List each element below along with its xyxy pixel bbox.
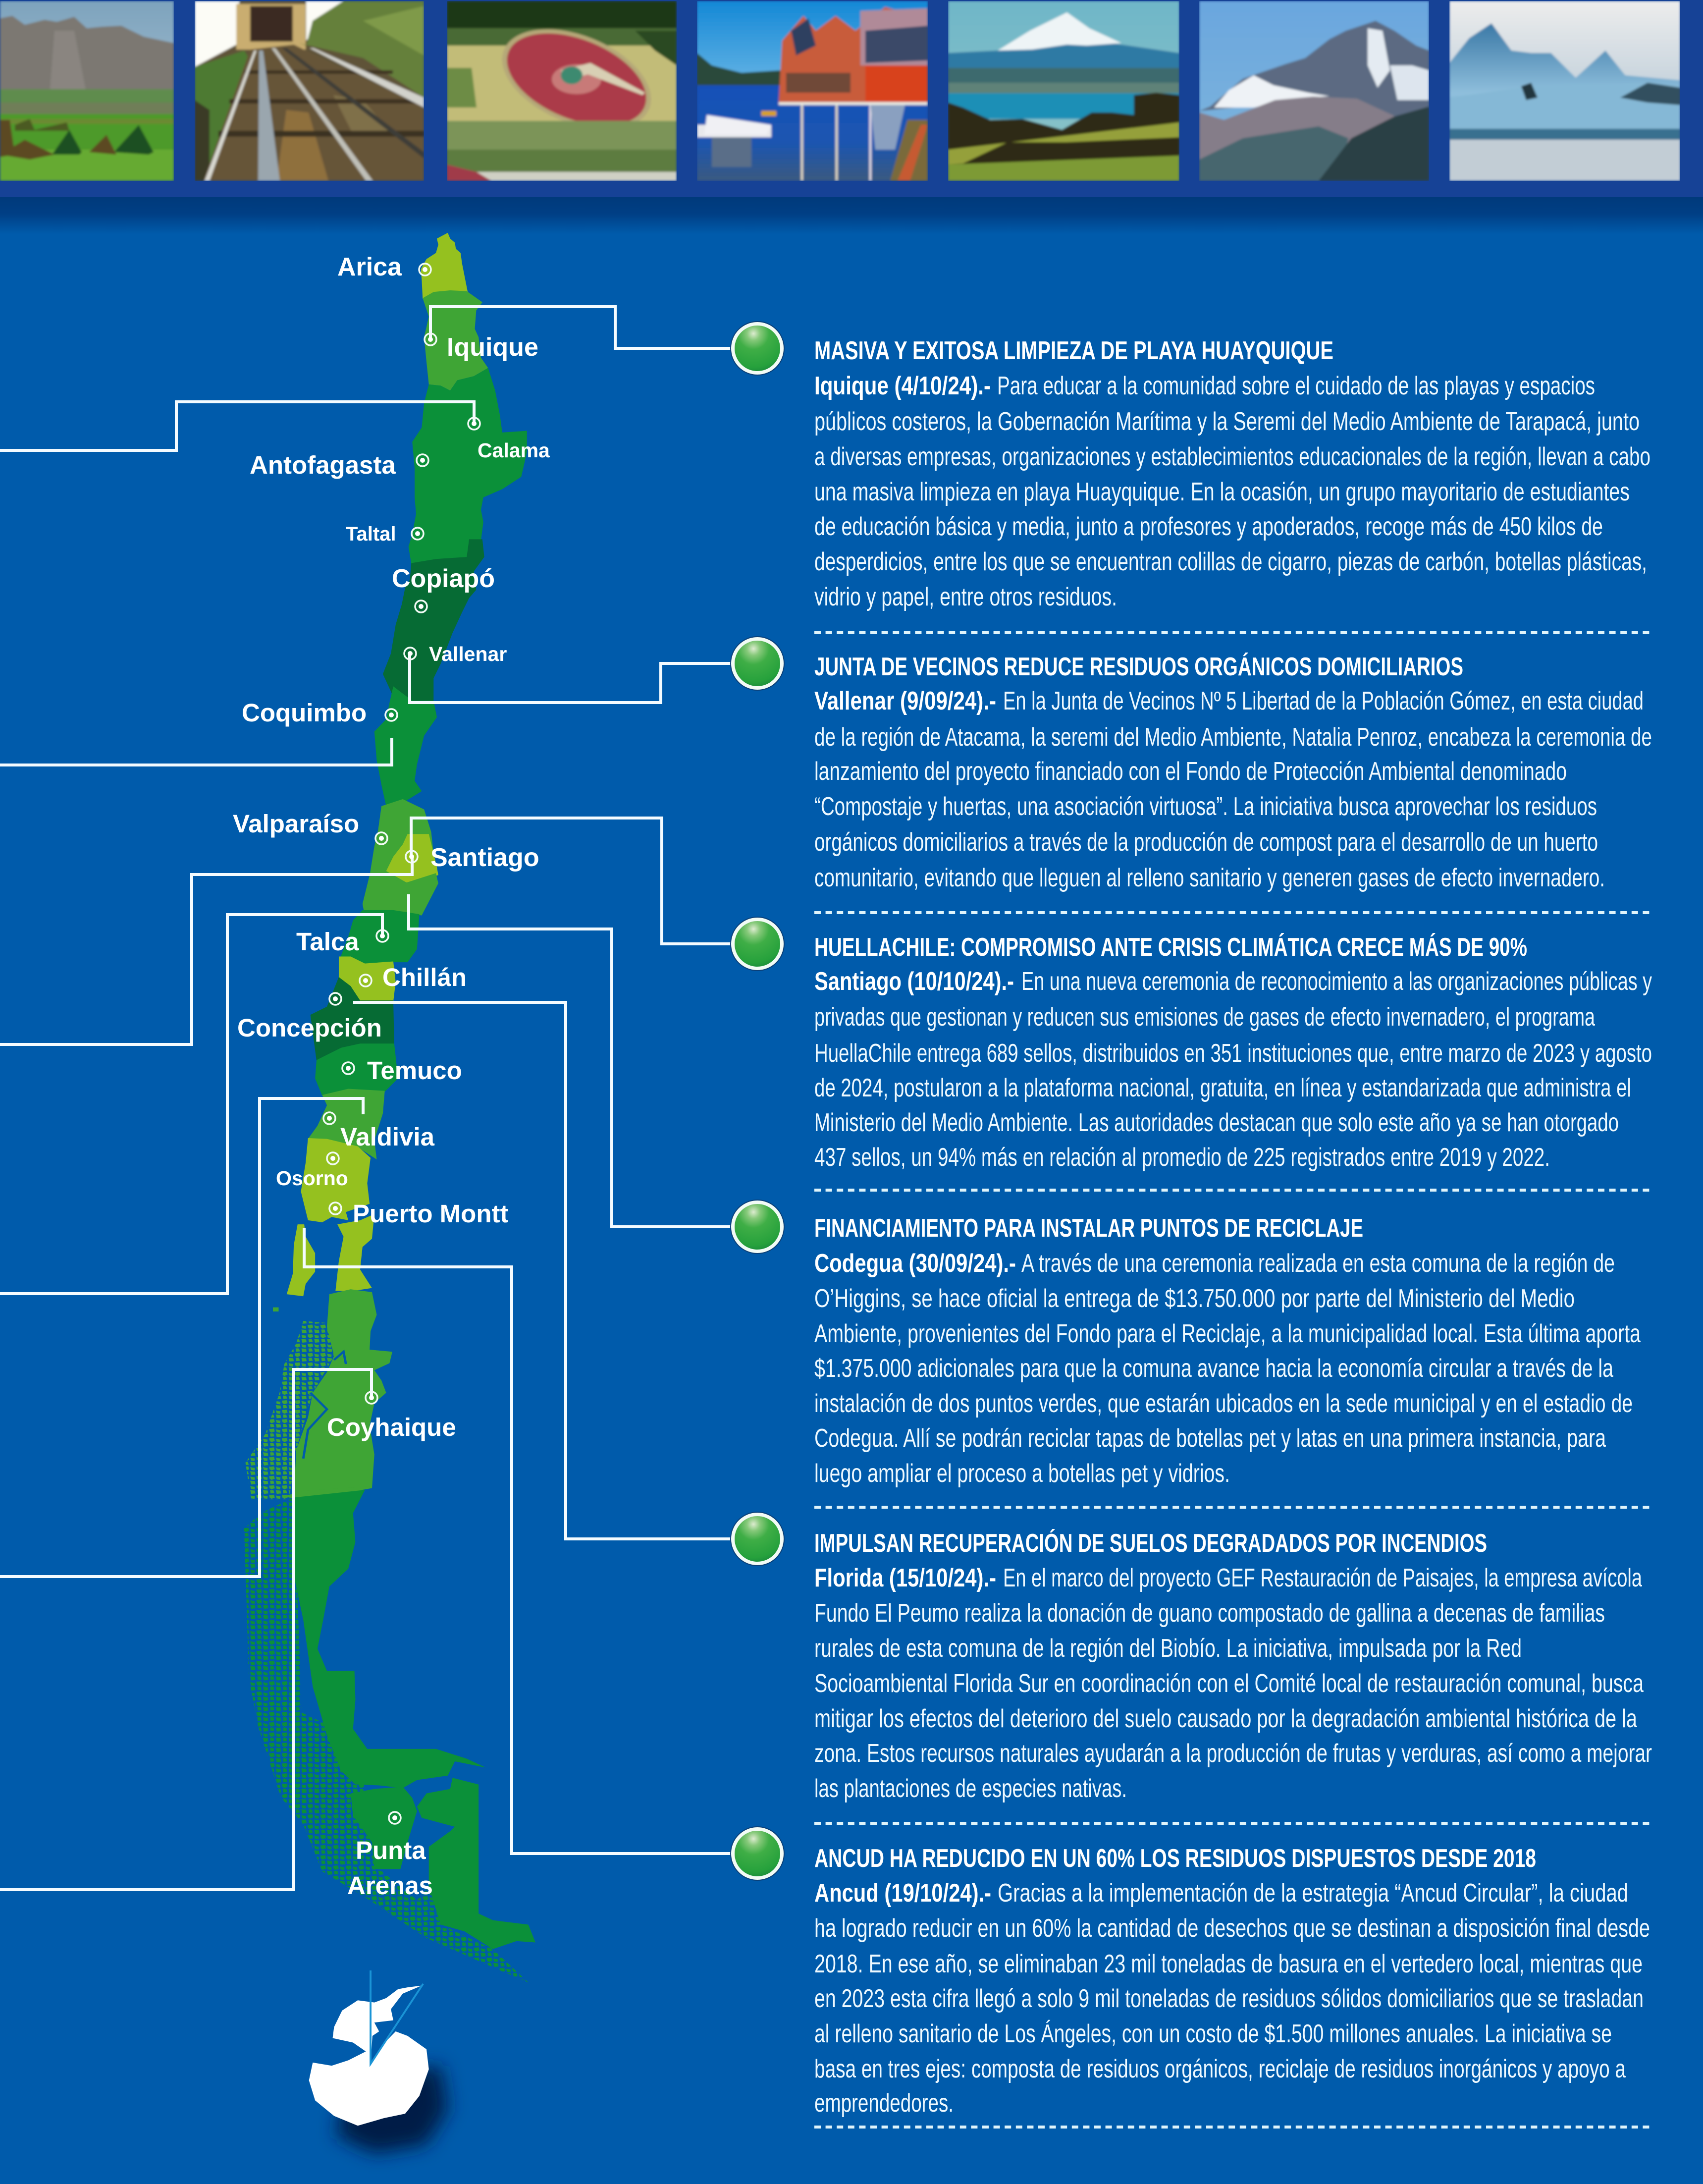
icon: antarctic continent [309,1986,429,2126]
text block [814,967,1652,1172]
photo: valley with mountain [0,1,174,181]
central and southern regions [246,799,438,1500]
text block: Codegua (30/09/24).- [814,1249,1016,1278]
city labels: Chillán [382,963,467,991]
icon: green bullet 1 [730,321,785,376]
city labels: Osorno [276,1167,348,1190]
icon: green bullet 4 [730,1200,785,1254]
city labels: Vallenar [429,643,507,665]
city labels: Concepción [237,1014,382,1042]
panel: news item HuellaChile [814,933,1652,1172]
text block: las plantaciones de especies nativas. [814,1774,1127,1803]
Antarctica [309,1970,448,2154]
city markers [323,264,480,1824]
panel: news item Codegua [814,1214,1641,1488]
city labels: Coyhaique [327,1413,456,1441]
icon: green bullet 6 [730,1826,785,1881]
text block: Iquique (4/10/24).- [814,372,991,400]
heading: MASIVA Y EXITOSA LIMPIEZA DE PLAYA HUAYQUIQUE [814,336,1333,365]
photo: flower clock [447,1,677,181]
panel: news item Vallenar [814,653,1652,892]
heading: IMPULSAN RECUPERACIÓN DE SUELOS DEGRADADOS POR INCENDIOS [814,1529,1487,1558]
photo: volcano and lake [948,1,1179,181]
text block: vidrio y papel, entre otros residuos. [814,583,1117,611]
city labels: Punta [356,1836,426,1864]
text block [814,1879,1650,2118]
city labels: Valdivia [340,1123,435,1151]
text block [814,1564,1652,1803]
photo: glacier and icy water [1449,1,1680,181]
text block [814,1249,1641,1488]
icon: green bullet 3 [730,917,785,971]
panel: news item Florida [814,1529,1652,1803]
city labels: Taltal [346,523,396,545]
icon: green bullet 5 [730,1512,785,1566]
photo: funicular tracks [195,1,424,181]
text block: Ancud (19/10/24).- [814,1879,991,1908]
icon: green bullet 2 [730,636,785,691]
city labels: Coquimbo [242,699,367,727]
text block [814,372,1650,611]
map of Chile [244,233,535,1982]
northern regions [374,233,527,806]
city labels [233,253,550,1900]
city labels: Talca [296,928,359,956]
panel: news item Huayquique [814,336,1650,611]
city labels: Iquique [447,333,538,362]
heading: FINANCIAMIENTO PARA INSTALAR PUNTOS DE RECICLAJE [814,1214,1363,1243]
city labels: Calama [478,439,550,462]
text block: emprendedores. [814,2089,954,2118]
photo strip [0,1,1680,181]
panel: news item Ancud [814,1844,1650,2118]
text block: Vallenar (9/09/24).- [814,687,996,715]
photo: snowy peak [1199,1,1429,181]
city labels: Copiapó [392,564,495,593]
text block: Florida (15/10/24).- [814,1564,996,1592]
city labels: Temuco [367,1056,462,1085]
city labels: Antofagasta [250,451,396,479]
Magallanes region [244,1486,535,1982]
city labels: Valparaíso [233,810,359,838]
text block [814,687,1652,892]
connector lines [0,307,733,1890]
territorial wedge [371,1970,423,2064]
text block: luego ampliar el proceso a botellas pet y vidrios. [814,1459,1230,1488]
city labels: Arenas [347,1871,433,1900]
city labels: Puerto Montt [353,1200,508,1228]
text block: Santiago (10/10/24).- [814,967,1014,996]
photo: palafitos and boats [697,1,928,181]
city labels: Arica [337,253,402,281]
city labels: Santiago [430,843,539,872]
heading: JUNTA DE VECINOS REDUCE RESIDUOS ORGÁNICOS DOMICILIARIOS [814,653,1463,681]
shadow [336,2065,448,2154]
header band [0,0,1703,234]
